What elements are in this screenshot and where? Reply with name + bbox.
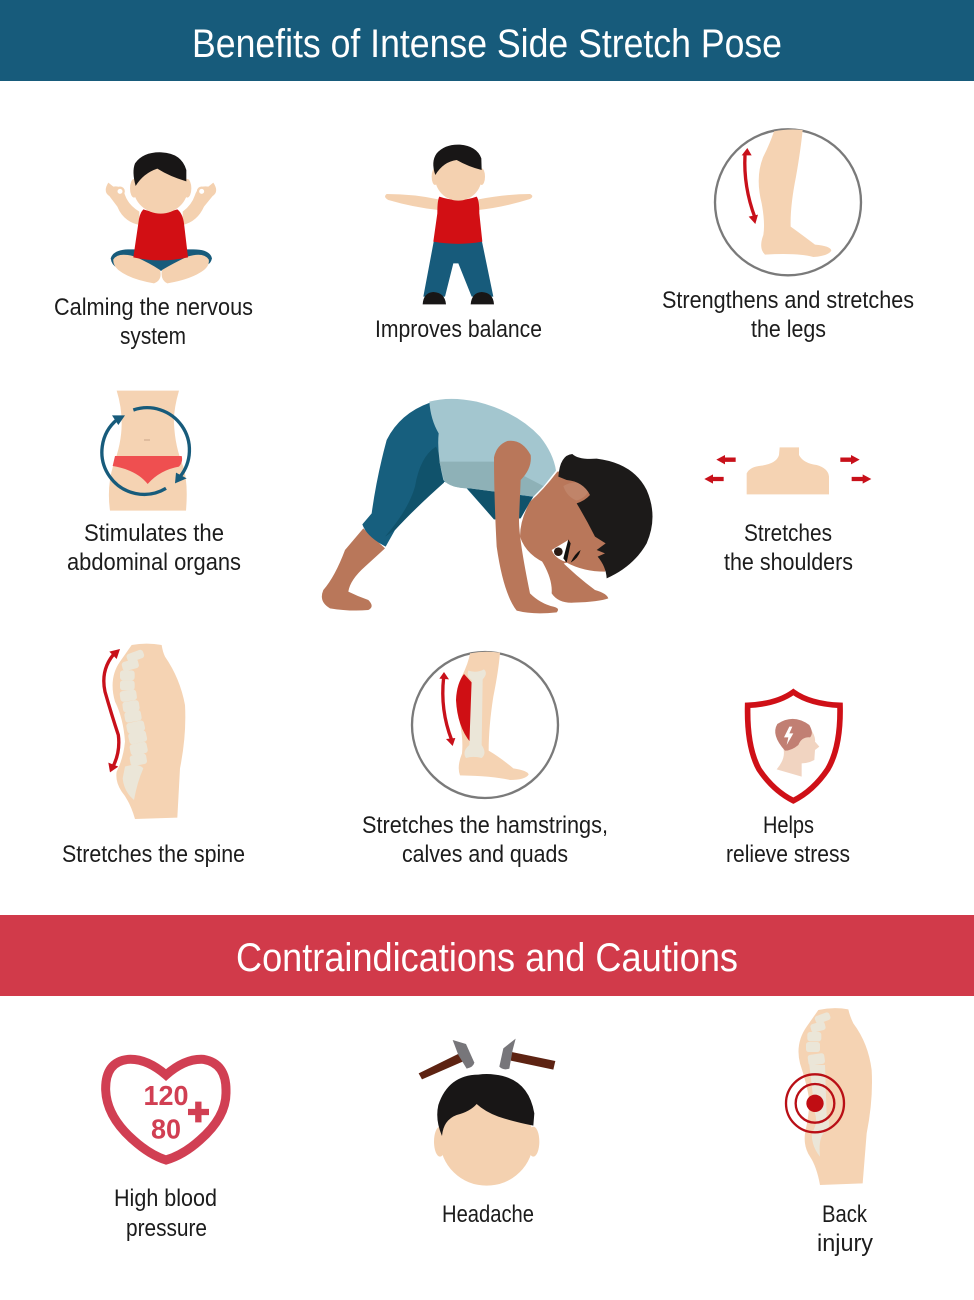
header band: benefits [0,0,974,81]
label: blood pressure: High blood [114,1185,217,1212]
trousers [362,403,533,547]
label: calming [54,294,253,350]
icon: spine side view [104,644,185,819]
title: Benefits of Intense Side Stretch Pose [192,22,782,66]
eye [552,540,569,562]
label: stress [726,812,850,868]
label: hamstrings: calves and quads [402,841,568,868]
label: blood pressure [114,1185,217,1242]
icon: shoulders with arrows [704,447,871,494]
label: back injury: Back [822,1201,868,1228]
label: balance: Improves balance [375,316,542,343]
arm [494,441,558,613]
label: shoulders: Stretches [744,520,832,547]
back leg [322,528,385,611]
icon: back with pain target [786,1008,872,1185]
icon: heart with blood pressure [106,1059,226,1160]
icon: head with hammers [419,1039,555,1186]
label: shoulders [724,520,853,576]
ear [563,482,590,501]
label: abdominal organs: abdominal organs [67,549,241,576]
label: hamstrings: Stretches the hamstrings, [362,812,608,839]
illustration: intense side stretch pose [322,399,652,613]
label: stress: Helps [763,812,814,839]
label: hamstrings [362,812,608,868]
label: legs: the legs [751,316,826,343]
label: calming: Calming the nervous [54,294,253,321]
label: blood pressure: pressure [126,1215,207,1242]
icon: abdomen with circular arrows [102,391,189,511]
label: legs: Strengthens and stretches [662,287,914,314]
section title: Contraindications and Cautions [236,936,738,980]
label: headache: Headache [442,1201,534,1228]
label: calming: system [120,323,186,350]
shirt [429,399,556,497]
icon: leg in circle [715,129,861,275]
hair [558,454,652,578]
label: abdominal organs: Stimulates the [84,520,224,547]
header band: contraindications [0,915,974,996]
label: spine: Stretches the spine [62,841,245,868]
label: legs [662,287,914,343]
icon: shield with head [748,692,840,801]
icon: seated meditating child [106,152,216,283]
neck and face [520,470,620,572]
icon: heart with blood pressure: 120 [143,1080,188,1111]
label: shoulders: the shoulders [724,549,853,576]
label: back injury [817,1201,873,1257]
icon: standing child with arms out [385,145,532,304]
label: stress: relieve stress [726,841,850,868]
icon: heart with blood pressure: 80 [151,1113,181,1144]
label: abdominal organs [67,520,241,576]
label: back injury: injury [817,1230,873,1257]
icon: leg with hamstring muscle in circle [412,652,558,798]
front foot [523,537,608,603]
